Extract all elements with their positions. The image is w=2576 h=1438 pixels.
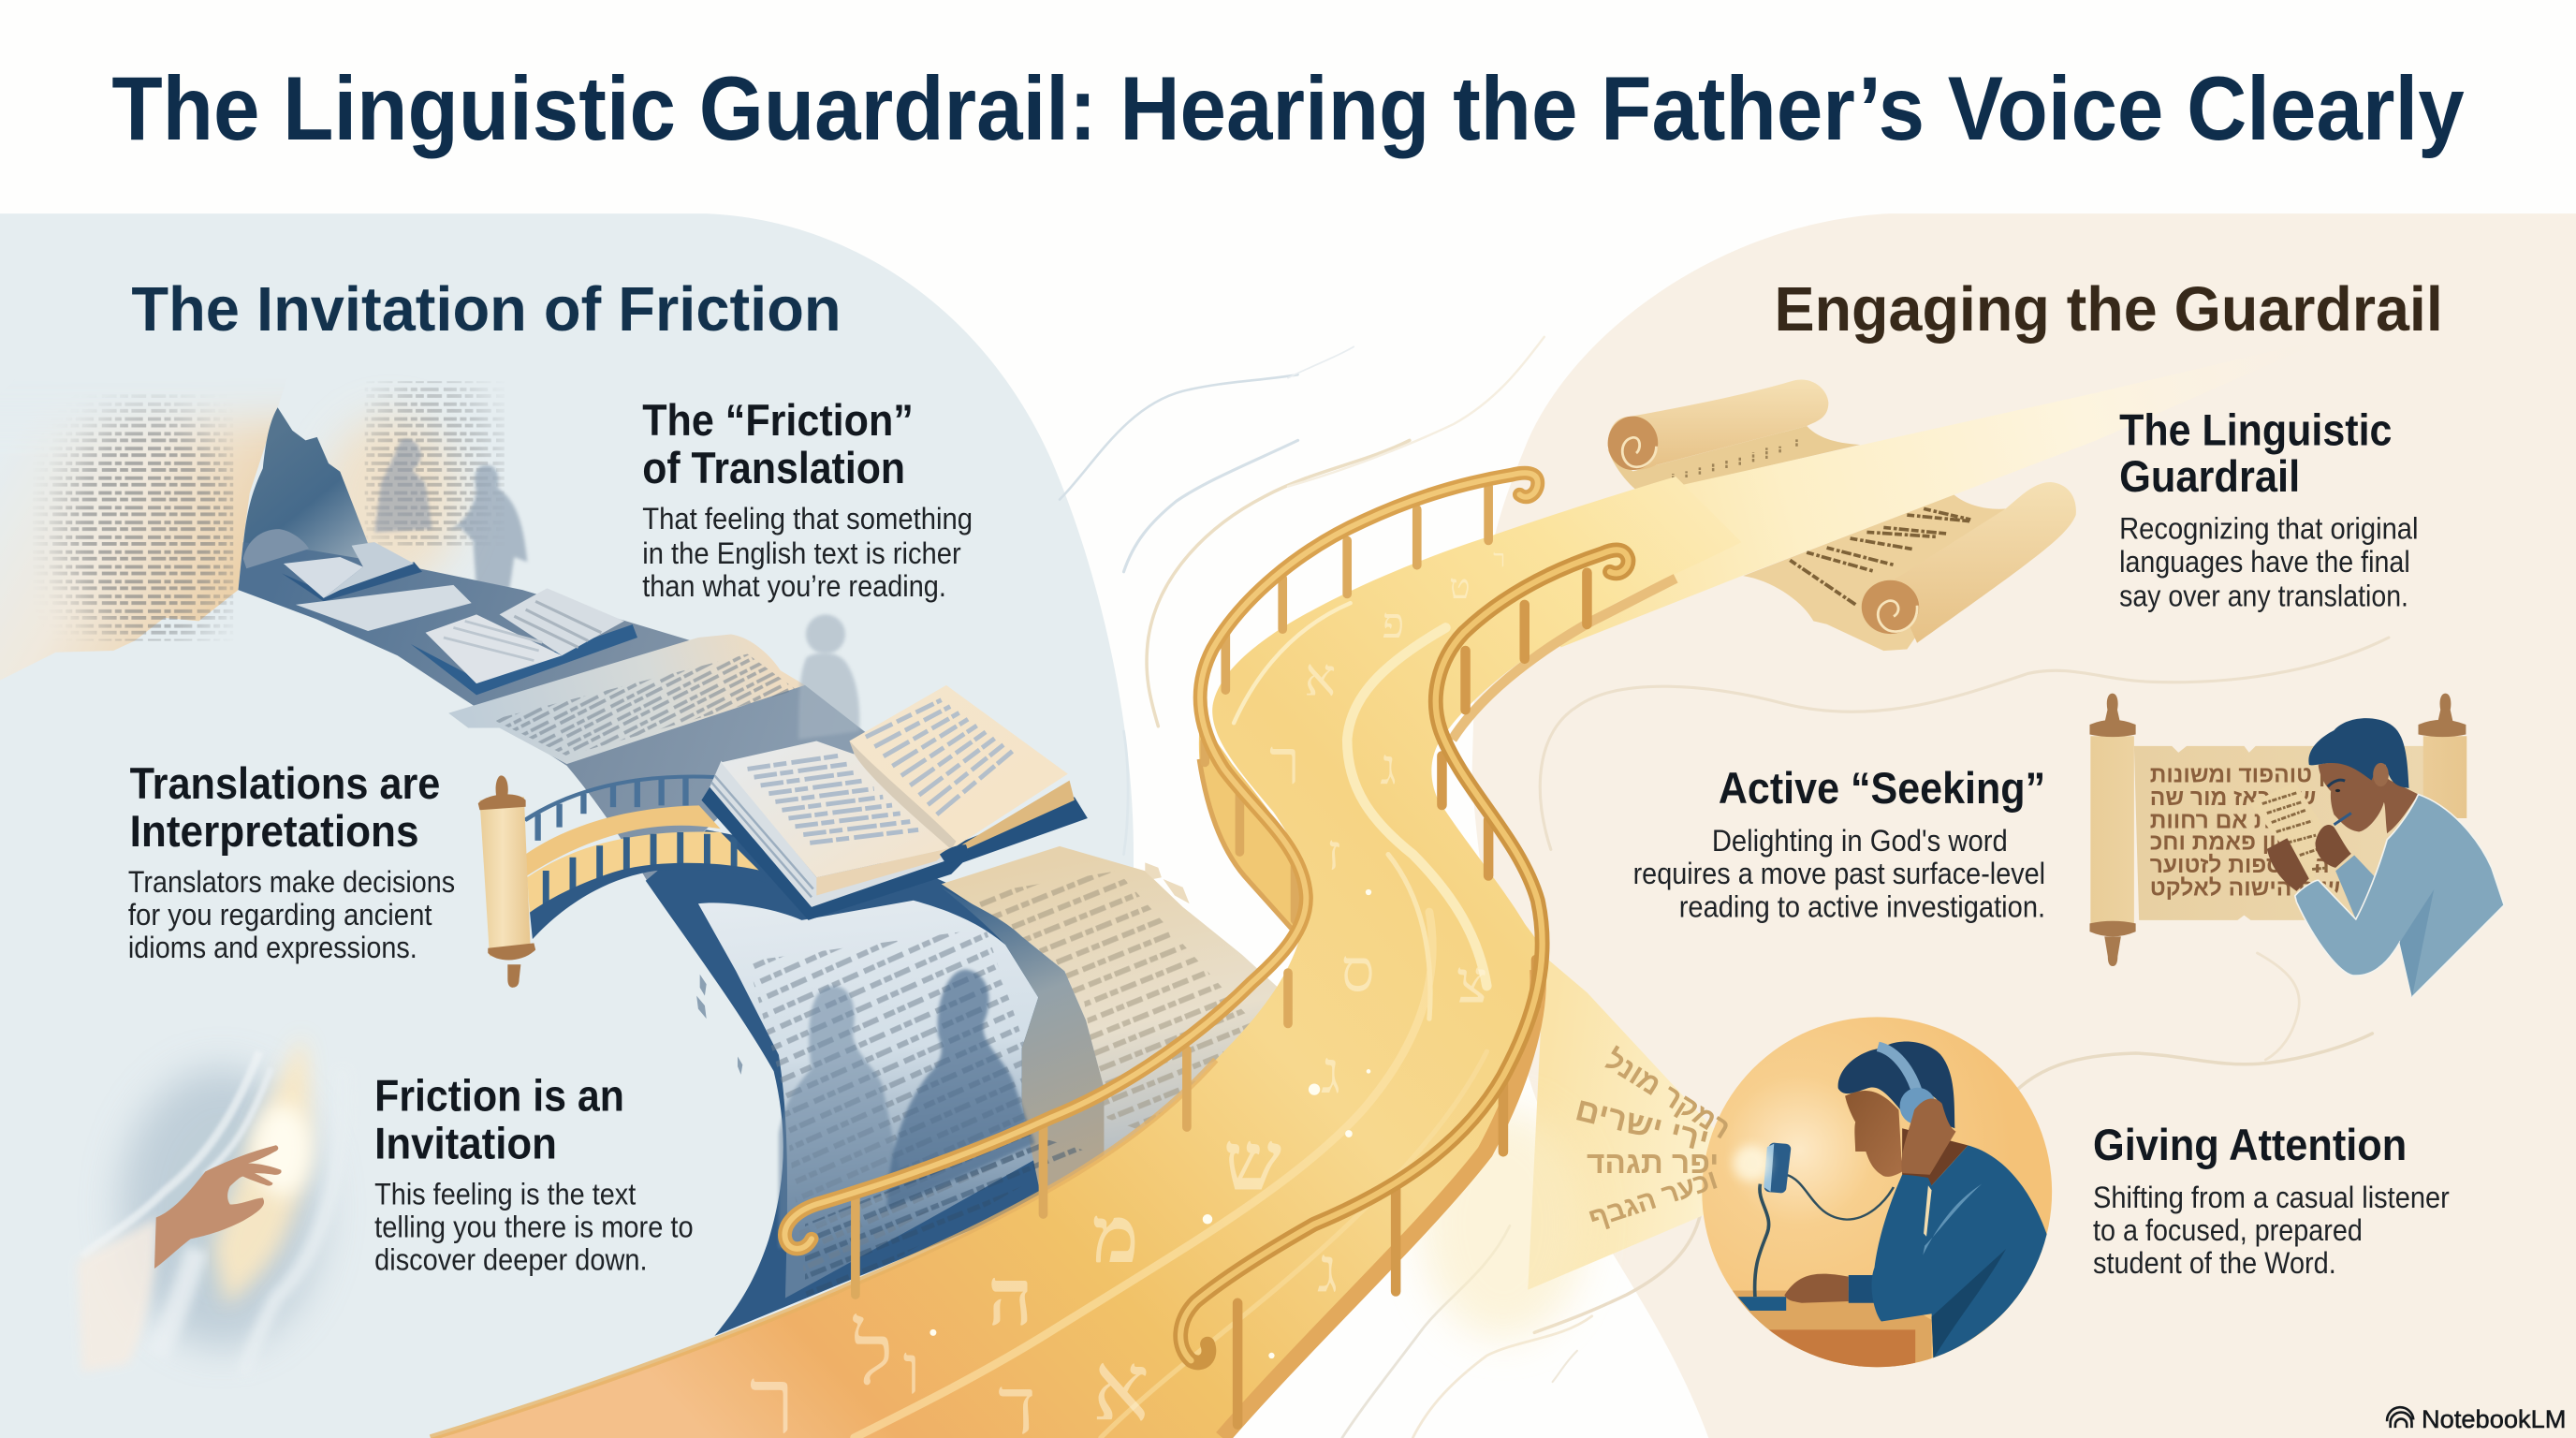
hand on desk xyxy=(1784,1274,1849,1303)
Hebrew letters on road: צ xyxy=(1456,950,1487,1016)
text block: friction is an invitation: discover deeper down. xyxy=(374,1243,648,1277)
Hebrew letters on road: ו xyxy=(903,1331,921,1408)
text block: active seeking xyxy=(1633,764,2045,923)
scroll parchment xyxy=(2134,746,2425,920)
road highlight bands xyxy=(855,603,1486,1438)
panel: right background xyxy=(1472,213,2576,1438)
NotebookLM logo and wordmark: NotebookLM xyxy=(2422,1404,2566,1433)
text block: friction is an invitation: This feeling is the text xyxy=(374,1177,636,1211)
glow below the road xyxy=(1421,1109,1586,1339)
text block: giving attention: student of the Word. xyxy=(2093,1246,2336,1280)
lower dark text xyxy=(805,1134,1084,1314)
Hebrew letters on road: ט xyxy=(1449,567,1471,606)
text block: friction of translation: of Translation xyxy=(642,444,905,493)
sweater xyxy=(1871,1145,2048,1358)
text block: friction of translation: in the English text is richer xyxy=(642,536,961,570)
Hebrew letters on road: ה xyxy=(988,1255,1033,1343)
Hebrew letters on road xyxy=(750,546,1505,1438)
text block: active seeking: Active “Seeking” xyxy=(1719,764,2045,814)
neck xyxy=(1902,1128,1968,1185)
Hebrew letters on road: ג xyxy=(1317,1238,1338,1306)
face xyxy=(1845,1091,1902,1177)
text block: translations are interpretations: idioms and expressions. xyxy=(128,931,417,964)
mic head xyxy=(1764,1142,1792,1194)
text block: the linguistic guardrail: languages have the final xyxy=(2119,545,2410,579)
panel: left background xyxy=(0,213,1134,1438)
heading: left panel: The Invitation of Friction xyxy=(131,275,842,345)
Hebrew letters in the cone: וכער הגבף xyxy=(1585,1164,1721,1235)
circle background xyxy=(1702,1017,2052,1367)
hand xyxy=(154,1145,282,1269)
Hebrew letters on road: פ xyxy=(1382,599,1404,647)
text block: friction of translation: than what you’re reading. xyxy=(642,569,946,603)
text block: the linguistic guardrail: Guardrail xyxy=(2119,452,2300,502)
heading: right panel: Engaging the Guardrail xyxy=(1775,275,2443,345)
text block: the linguistic guardrail: The Linguistic xyxy=(2119,406,2392,456)
reading man xyxy=(2249,718,2504,997)
raised hand xyxy=(1901,1098,1955,1175)
Hebrew letters in the cone: יפר תגהד xyxy=(1587,1146,1719,1181)
text block: translations are interpretations: Translations are xyxy=(130,759,440,809)
mic sparkles xyxy=(1734,1145,1769,1181)
illustration: parchment strip xyxy=(448,634,805,764)
scroll Hebrew text: טית אם רחוות xyxy=(2150,809,2292,834)
text block: giving attention xyxy=(2093,1121,2450,1280)
text block: the linguistic guardrail: say over any translation. xyxy=(2119,580,2408,613)
text block: friction is an invitation: Invitation xyxy=(374,1119,557,1168)
illustration: slate path carrying books xyxy=(238,542,879,884)
bridge railing, deck and arch xyxy=(524,777,768,939)
upper scroll xyxy=(1608,379,1860,494)
headset xyxy=(1878,1047,1918,1094)
illustration: ghost figures in upper path xyxy=(374,439,527,590)
text block: friction of translation: The “Friction” xyxy=(642,396,914,446)
illustration: listener in circle xyxy=(1702,1017,2052,1372)
scroll rollers xyxy=(2090,736,2466,923)
Hebrew letters on road: ס xyxy=(1341,938,1375,1004)
hair xyxy=(1838,1042,1954,1128)
text block: giving attention: to a focused, prepared xyxy=(2093,1213,2363,1247)
scroll Hebrew text: פון פאמת וחכ xyxy=(2150,829,2291,855)
text block: translations are interpretations: Interpretations xyxy=(130,807,419,857)
text block: friction is an invitation: Friction is an xyxy=(374,1071,624,1121)
Hebrew letters on road: מ xyxy=(1092,1193,1139,1280)
torn gap between pages xyxy=(942,888,1104,1208)
scroll Hebrew text xyxy=(2150,762,2388,902)
Hebrew letters on road: ג xyxy=(1321,1040,1340,1106)
Hebrew letters on road: ש xyxy=(1223,1117,1281,1208)
illustration: torn pages with rip xyxy=(0,353,505,681)
text block: the linguistic guardrail xyxy=(2119,406,2419,613)
light cone from road to microphone xyxy=(1528,956,1761,1290)
desk xyxy=(1732,1290,1932,1367)
illustration: little bridge with scroll xyxy=(478,775,768,988)
sleeve xyxy=(77,1218,157,1372)
curtain streaks xyxy=(82,1051,259,1257)
illustration: loose page strip xyxy=(296,585,472,631)
road left side fascia xyxy=(1199,723,1309,927)
text block: friction is an invitation xyxy=(374,1071,694,1277)
Hebrew letters in the cone xyxy=(1572,1042,1737,1235)
Hebrew letters on road: ג xyxy=(1380,741,1397,795)
road surface xyxy=(431,477,1741,1438)
scroll Hebrew text: ליר טון טוהפוד ומשונות xyxy=(2150,762,2388,787)
flowing wisps xyxy=(1060,337,2389,1438)
Hebrew letters on road: א xyxy=(1305,649,1336,707)
Hebrew letters in the cone: ירי ישרים xyxy=(1572,1091,1713,1159)
blue page text xyxy=(748,929,1035,1282)
illustration: scroll with reading man xyxy=(2089,694,2504,997)
text block: giving attention: Giving Attention xyxy=(2093,1121,2407,1170)
text block: friction of translation: That feeling that something xyxy=(642,502,973,536)
scroll Hebrew text: החהספות לזטוער xyxy=(2150,853,2330,878)
illustration: hand reaching through curtain xyxy=(77,1035,343,1377)
illustration: descending road xyxy=(646,829,1298,1336)
text block: translations are interpretations: Translators make decisions xyxy=(128,865,455,899)
Hebrew letters in the cone: רמקר מונל xyxy=(1599,1042,1737,1146)
scroll pole xyxy=(479,797,531,956)
illustration: big open book xyxy=(701,685,1088,920)
illustration: mid open book xyxy=(411,588,637,695)
golden road xyxy=(431,477,1741,1438)
text block: translations are interpretations: for you regarding ancient xyxy=(128,898,432,932)
text block: active seeking: requires a move past surface-level xyxy=(1633,857,2045,890)
road right fascia xyxy=(1453,579,1676,740)
illustration: small closed book xyxy=(243,529,309,568)
Hebrew letters on road: ז xyxy=(1327,826,1340,880)
scroll Hebrew text: שום הישוה לאלקט xyxy=(2150,876,2340,902)
falling paper fragments xyxy=(696,975,742,1075)
text block: the linguistic guardrail: Recognizing that original xyxy=(2119,512,2419,546)
illustration: ghost figure near big book xyxy=(798,614,859,740)
text block: friction is an invitation: telling you there is more to xyxy=(374,1211,694,1244)
silhouettes on page xyxy=(779,986,902,1249)
Hebrew letters on road: ר xyxy=(1269,729,1300,798)
text block: friction of translation xyxy=(642,396,973,603)
Hebrew letters on road: ר xyxy=(1493,546,1505,573)
text block: giving attention: Shifting from a casual listener xyxy=(2093,1181,2450,1214)
illustration: top scrolls xyxy=(1608,379,2076,651)
text block: translations are interpretations xyxy=(128,759,455,964)
Hebrew letters on road: ל xyxy=(853,1308,893,1402)
text block: active seeking: reading to active investigation. xyxy=(1679,889,2045,923)
parchment: blue page xyxy=(698,901,1051,1299)
warm page text xyxy=(970,871,1265,1134)
text block: active seeking: Delighting in God's word xyxy=(1712,824,2008,858)
far guardrail xyxy=(784,473,1538,1295)
parchment: warm page xyxy=(942,846,1298,1191)
lower scroll xyxy=(1743,482,2076,651)
scroll Hebrew text: שיון כאז מור שה xyxy=(2150,785,2316,811)
sparkles xyxy=(929,889,1371,1358)
light beam rising from the road xyxy=(1528,337,2333,648)
near guardrail xyxy=(1180,550,1628,1425)
mic stem and cable xyxy=(1755,1184,1769,1297)
illustration: small open book xyxy=(282,542,422,601)
